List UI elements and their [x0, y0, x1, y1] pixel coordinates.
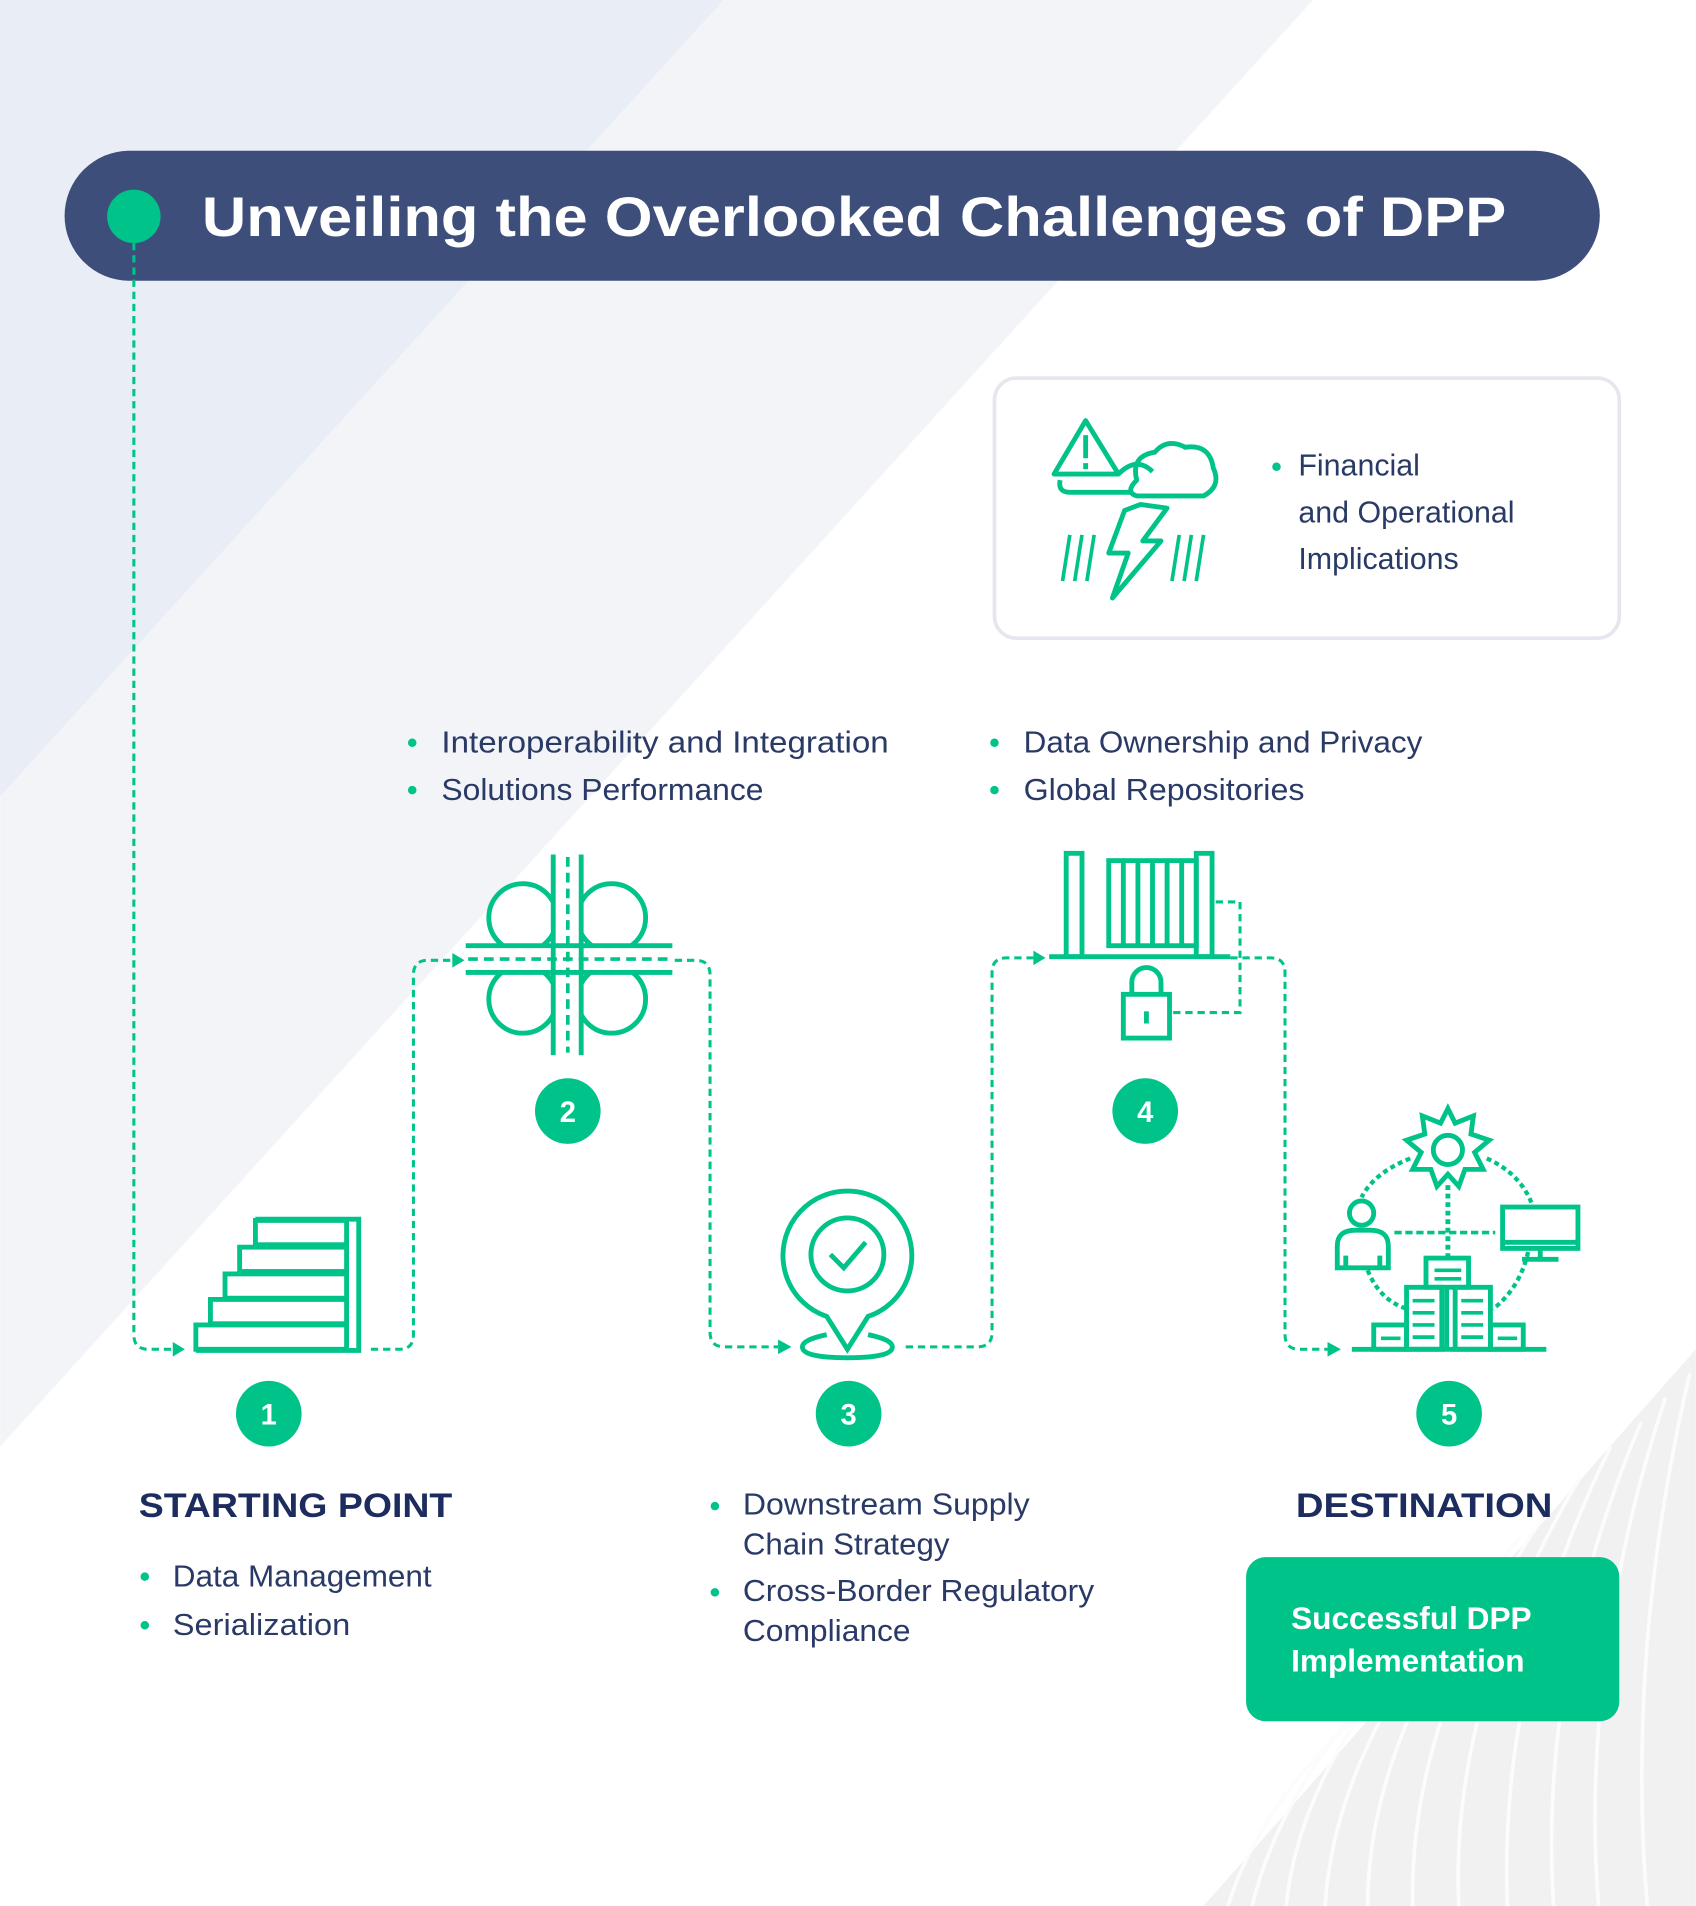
text: step 1 bullets — [141, 1559, 432, 1642]
text: step 2 bullets — [408, 725, 889, 807]
text: step 1 bullets: Data Management — [173, 1559, 432, 1593]
number badges: 1 — [261, 1400, 277, 1432]
heading: starting point: STARTING POINT — [139, 1487, 453, 1525]
text: step 3 bullets: Chain Strategy — [743, 1528, 950, 1562]
card: financial implications: and Operational — [1298, 496, 1515, 530]
text: step 4 bullets — [990, 725, 1423, 807]
callout: successful implementation — [1246, 1557, 1619, 1721]
number badges: 3 — [840, 1400, 857, 1432]
text: step 3 bullets: Compliance — [743, 1614, 911, 1648]
text: step 3 bullets: Cross-Border Regulatory — [743, 1574, 1095, 1608]
card: financial implications: Financial — [1298, 448, 1420, 482]
text: step 1 bullets: Serialization — [173, 1608, 350, 1642]
number badges: 4 — [1137, 1097, 1154, 1129]
card: financial implications: Implications — [1298, 542, 1459, 576]
number badges: 5 — [1441, 1400, 1457, 1432]
callout: successful implementation: Implementation — [1291, 1642, 1525, 1678]
text: step 2 bullets: Interoperability and Integration — [441, 725, 889, 759]
number badges: 2 — [560, 1097, 576, 1129]
text: step 2 bullets: Solutions Performance — [441, 773, 764, 807]
text: step 3 bullets: Downstream Supply — [743, 1488, 1031, 1522]
text: step 4 bullets: Data Ownership and Privacy — [1024, 725, 1423, 759]
arrowheads — [173, 951, 1341, 1357]
callout: successful implementation: Successful DPP — [1291, 1600, 1532, 1636]
heading: destination: DESTINATION — [1296, 1487, 1552, 1525]
icon: storm — [1054, 421, 1216, 598]
icon: gate and lock — [1049, 853, 1230, 1038]
title bar — [65, 151, 1600, 281]
text: step 4 bullets: Global Repositories — [1024, 773, 1304, 807]
dashed path connectors — [134, 243, 1328, 1349]
title bar: Unveiling the Overlooked Challenges of DPP — [202, 185, 1506, 248]
icon: destination network — [1337, 1109, 1578, 1349]
card: financial implications — [994, 378, 1619, 638]
icon: location check — [783, 1191, 912, 1358]
icon: stairs — [196, 1219, 359, 1350]
text: step 3 bullets — [711, 1488, 1095, 1648]
icon: cloverleaf interchange — [466, 855, 672, 1055]
number badges — [236, 1078, 1482, 1447]
